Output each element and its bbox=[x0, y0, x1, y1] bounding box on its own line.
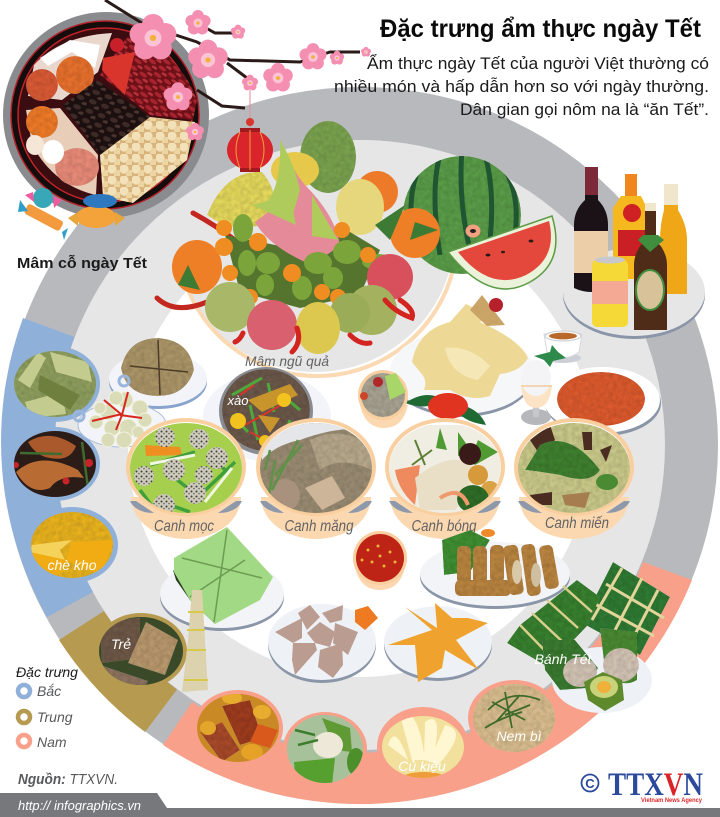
egg in cup bbox=[521, 360, 552, 425]
bowl: Canh măng: Canh măng bbox=[284, 518, 354, 535]
dish: Bánh Tét and bánh chưng bbox=[507, 562, 670, 713]
dish: chè kho bbox=[31, 512, 113, 578]
legend: Nam bbox=[37, 734, 67, 750]
tray compartment: coconut and lotus bbox=[26, 33, 112, 195]
dish: red sticky rice bbox=[544, 367, 661, 436]
dish: spring rolls bbox=[420, 529, 570, 609]
drinks plate bbox=[563, 167, 705, 339]
peach blossom branch bbox=[105, 0, 371, 140]
dessert tray bbox=[3, 12, 209, 218]
bowl: Canh bóng bbox=[385, 418, 505, 539]
dish: Nem bì bbox=[473, 684, 555, 752]
intro text: Ẩm thực ngày Tết của người Việt thường có bbox=[367, 54, 709, 73]
dish: xào bbox=[203, 367, 331, 461]
dish: braised fish bbox=[14, 431, 96, 497]
dish: xào: xào bbox=[227, 393, 248, 408]
tray compartment: candied balls bbox=[100, 117, 195, 203]
bowl: Canh mọc bbox=[126, 418, 246, 539]
dish: Trẻ bbox=[99, 617, 183, 685]
lantern bbox=[227, 90, 273, 172]
watermelon slice bbox=[448, 216, 556, 289]
dish: sour pickles bbox=[14, 351, 96, 417]
watermelon bbox=[403, 150, 521, 274]
label: Mâm ngũ quả: Mâm ngũ quả bbox=[245, 353, 329, 369]
intro text: Dân gian gọi nôm na là “ăn Tết”. bbox=[460, 100, 709, 119]
region band: Bắc (north) bbox=[1, 318, 118, 617]
legend bbox=[16, 664, 78, 750]
bowl: Canh miến: Canh miến bbox=[545, 515, 609, 532]
candies bbox=[18, 188, 125, 240]
title: Đặc trưng ẩm thực ngày Tết bbox=[380, 15, 702, 43]
bottle: wine bbox=[574, 167, 608, 292]
dish: Bánh Tét and bánh chưng: Bánh Tét bbox=[535, 651, 593, 667]
logo: TTXVN: TTXVN bbox=[608, 767, 703, 803]
dish: Củ kiệu: Củ kiệu bbox=[398, 758, 446, 774]
label: Mâm cỗ ngày Tết: Mâm cỗ ngày Tết bbox=[17, 255, 147, 272]
dish: Củ kiệu bbox=[382, 716, 464, 778]
dish: chè kho: chè kho bbox=[47, 557, 97, 573]
dish: tied bamboo bundle bbox=[182, 590, 208, 692]
bowl: Canh miến bbox=[514, 418, 634, 539]
tea cup bbox=[534, 331, 582, 367]
dish: pickled onions bbox=[74, 376, 166, 448]
region band: Nam (south) bbox=[163, 562, 692, 804]
dish: boiled chicken bbox=[390, 295, 534, 417]
garnish: tomato rose and leaves bbox=[405, 393, 486, 425]
dish: bánh chưng bbox=[160, 527, 284, 631]
dish: orange star cake bbox=[384, 603, 492, 682]
legend: Bắc bbox=[37, 683, 61, 699]
tray compartment: black seeds bbox=[63, 80, 150, 155]
bowl: Canh bóng: Canh bóng bbox=[412, 518, 477, 535]
logo: TTXVN: Vietnam News Agency bbox=[641, 797, 702, 804]
dish: sliced pork roll bbox=[268, 604, 378, 683]
dish: jellied pork bbox=[109, 338, 207, 409]
fruit tray plate bbox=[179, 140, 454, 378]
soursop bbox=[300, 121, 356, 193]
legend: Đặc trưng bbox=[16, 664, 78, 680]
footer bar: http:// infographics.vn bbox=[18, 798, 141, 813]
can bbox=[592, 256, 628, 327]
source note: Nguồn: TTXVN. bbox=[18, 771, 118, 788]
bottle: brown beer bbox=[634, 203, 667, 330]
region band: Trung (central) bbox=[59, 611, 187, 732]
footer bar bbox=[0, 793, 720, 817]
bowl: Canh măng bbox=[256, 418, 376, 539]
bowl: Canh mọc: Canh mọc bbox=[154, 518, 214, 535]
dish: small bowl with lime bbox=[358, 370, 408, 428]
dish: Trẻ: Trẻ bbox=[111, 636, 131, 652]
dish: Nem bì: Nem bì bbox=[496, 728, 542, 744]
intro text bbox=[334, 54, 709, 119]
dish: dipping sauce bowl bbox=[353, 531, 407, 590]
dish: thịt kho trứng bbox=[195, 692, 281, 764]
bottle: whisky bbox=[613, 174, 647, 279]
intro text: nhiều món và hấp dẫn hơn so với ngày thường. bbox=[334, 77, 709, 96]
firecrackers bbox=[102, 52, 135, 95]
dish: canh khổ qua bbox=[287, 715, 363, 783]
tray compartment: red berries bbox=[100, 37, 197, 120]
fruit pyramid bbox=[157, 140, 440, 354]
legend: Trung bbox=[37, 709, 73, 725]
bottle: light beer bbox=[660, 184, 687, 294]
logo: TTXVN: C bbox=[585, 776, 595, 791]
